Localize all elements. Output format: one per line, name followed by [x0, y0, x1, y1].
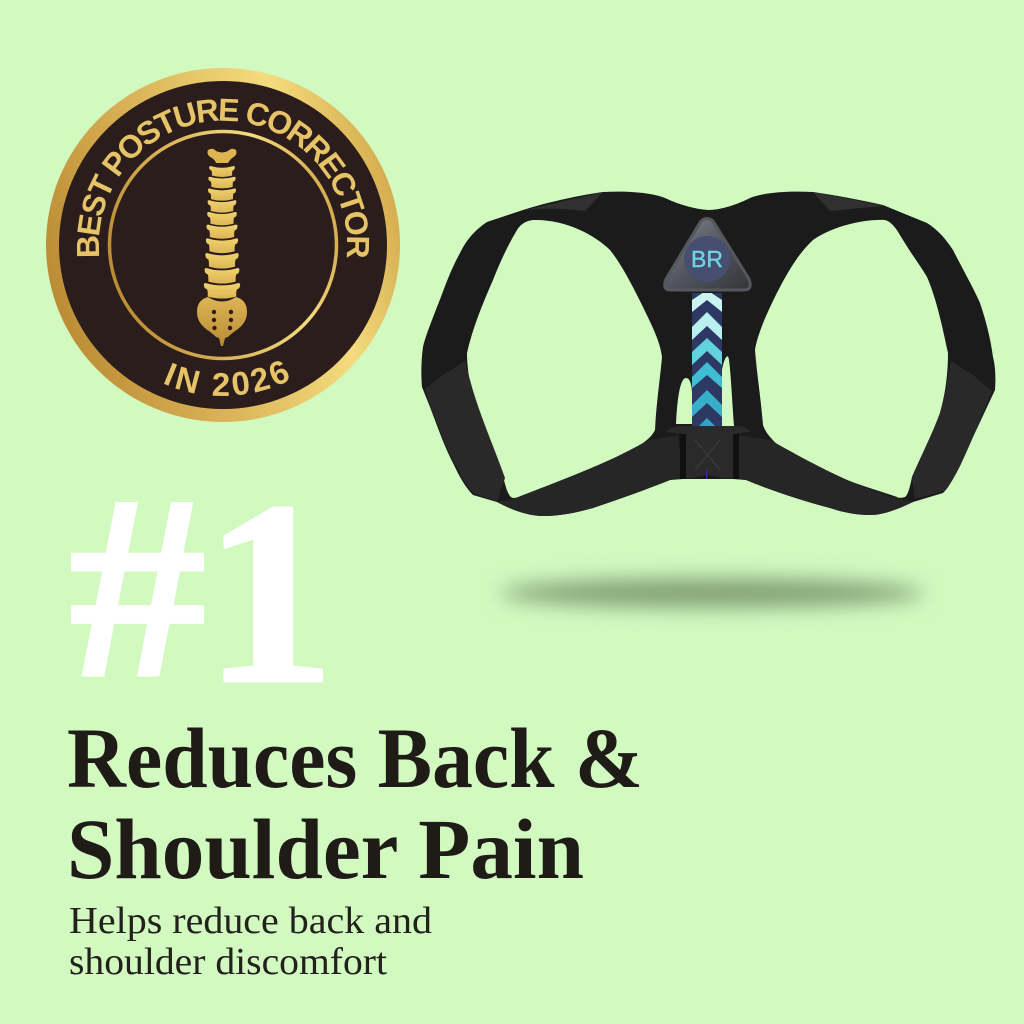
brace: right lower strap [733, 435, 913, 515]
heading [67, 710, 643, 897]
brace: left lower pad [425, 361, 505, 501]
heading: Shoulder Pain [67, 801, 584, 897]
shadow under product [500, 578, 924, 608]
subheading text [69, 900, 432, 983]
brace: left slot [676, 378, 692, 424]
brace: top right patch [813, 192, 885, 211]
badge text: bottom arc: IN 2026 [164, 361, 289, 396]
product: posture corrector brace [421, 192, 995, 516]
triangle logo patch [665, 218, 750, 290]
icon: spine [197, 149, 247, 346]
icon: sacrum [197, 297, 247, 346]
subheading text: shoulder discomfort [69, 941, 387, 983]
subheading text: Helps reduce back and [69, 900, 432, 942]
big number #1: 1 [204, 448, 335, 738]
brace: right lower pad [912, 361, 992, 499]
big number #1: # [69, 442, 206, 732]
brace: right slot [722, 356, 734, 426]
brace: left lower strap [497, 435, 683, 516]
badge: best posture corrector in 2026 [46, 68, 400, 422]
brace: centre clasp [666, 426, 750, 479]
brace: top left patch [525, 192, 603, 211]
chevron strip [692, 293, 722, 426]
big number #1 [69, 442, 335, 738]
badge text: top arc: BEST POSTURE CORRECTOR [76, 98, 370, 258]
heading: Reduces Back & [67, 710, 643, 806]
BR logo text: BR [691, 246, 723, 272]
inner ring [110, 132, 336, 358]
